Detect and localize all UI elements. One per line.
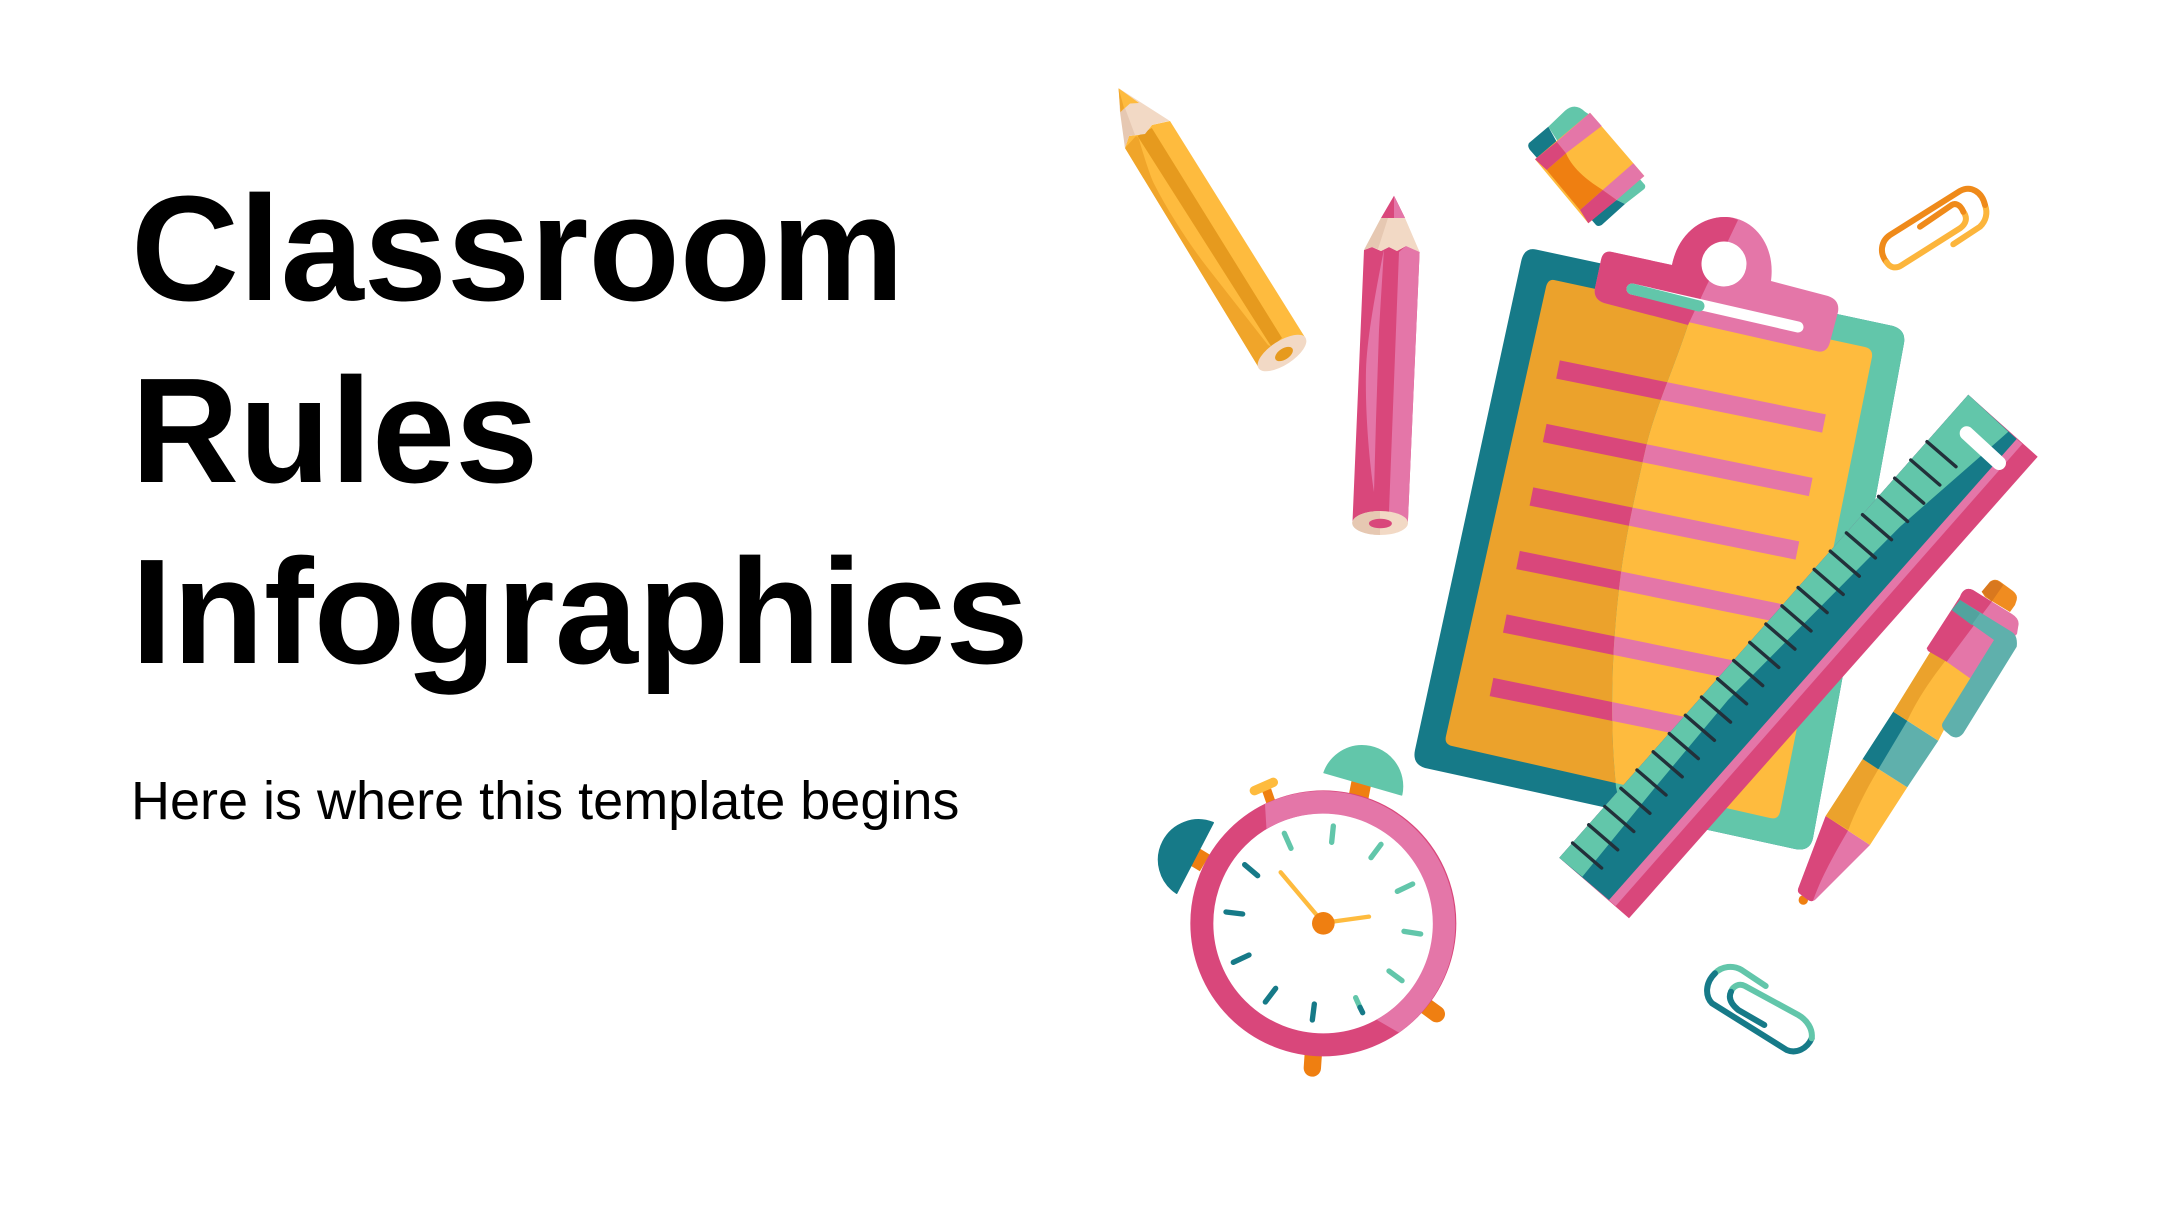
ruler slot [1967, 433, 1999, 463]
clipboard clip [1595, 217, 1838, 352]
clock bell stems [1358, 783, 1361, 798]
icon: ruler [1559, 395, 2038, 918]
paper text lines [1492, 370, 1824, 741]
clock ring [1213, 813, 1433, 1033]
subtitle: Here is where this template begins [131, 771, 959, 831]
icon: orange paperclip [1882, 189, 1986, 267]
icon: eraser [1528, 107, 1645, 226]
icon: yellow pencil [1119, 88, 1312, 378]
clock ticks [1226, 826, 1421, 1020]
clipboard paper [1446, 280, 1689, 783]
title [131, 165, 1029, 695]
title: Rules [131, 346, 538, 514]
clock feet [1286, 1053, 1339, 1068]
icon: pink pencil [1352, 196, 1420, 535]
title: Infographics [131, 528, 1029, 695]
clipboard board [1414, 249, 1904, 850]
icon: pen [1798, 580, 2019, 905]
title: Classroom [131, 165, 904, 332]
ruler ticks [1573, 442, 1956, 868]
icon: alarm clock [1158, 746, 1455, 1068]
clock hands [1281, 872, 1369, 922]
clipboard [1414, 217, 1904, 850]
clock bells [1324, 746, 1403, 795]
icon: teal paperclip [1707, 967, 1812, 1051]
illustration [1118, 88, 2038, 1077]
